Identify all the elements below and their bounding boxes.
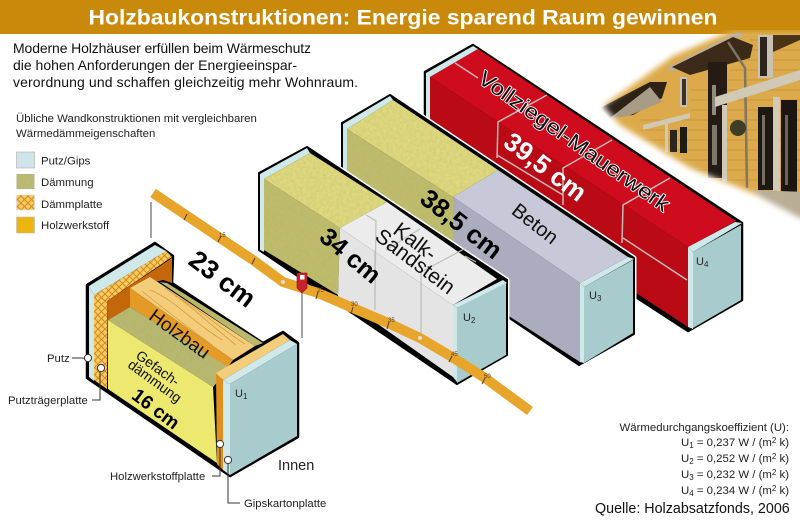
U-values table: Wärmedurchgangskoeffizient (U): [620,422,789,434]
tape ticks and numbers: 25 [317,288,324,294]
label Holzbau: Holzbau [145,306,214,364]
label 23 cm: 23 cm [183,244,261,313]
limestone joints [366,215,476,340]
label U1: 1 [243,392,248,401]
label U2: U [463,312,471,324]
block U1 silhouette [87,243,298,476]
block U3 concrete front [453,197,580,362]
label U2: 2 [471,316,476,325]
label Kalk-Sandstein: Kalk- [389,218,441,265]
tape ticks and numbers [184,214,491,384]
timber stud front [130,288,233,367]
legend item: Dämmung: Dämmung [41,177,94,189]
tape ticks and numbers: 35 [388,318,395,324]
block U3 plaster back [343,96,393,205]
U-values table: U [681,469,689,481]
block U4 plaster top [688,222,742,252]
U-values table: k) [776,485,789,497]
Dämmplatte side [94,295,107,389]
wood panel top [216,334,290,380]
callout: Gipskartonplatte [224,456,326,510]
title bar [0,0,800,34]
U-values table: k) [776,469,789,481]
block U3 plaster side [580,283,584,363]
intro text: die hohen Anforderungen der Energieeinspar- [13,57,297,73]
block U4 plaster side [688,247,693,329]
tape ticks and numbers: 45 [451,352,458,358]
callout: Putz: Putz [47,353,70,365]
rear insulation sliver [160,282,263,346]
callout: Gipskartonplatte: Gipskartonplatte [244,498,326,510]
block U3 insulation front [347,129,453,280]
Gefachdämmung top [108,307,230,387]
legend heading: Wärmedämmeigenschaften [16,128,155,140]
tape ticks and numbers: 30 [351,302,358,308]
block U4 silhouette [425,45,742,331]
label Beton: Beton [507,200,562,249]
U-values table: U [681,453,689,465]
block U4 red front [430,77,688,327]
U-values table: 2 [772,452,777,461]
label Vollziegel-Mauerwerk: Vollziegel-Mauerwerk [474,67,674,217]
U-values table: = 0,252 W / (m [694,453,772,465]
block U2 insulation front [264,179,340,295]
exterior plaster top [89,245,166,295]
block U2 inner face [457,283,506,383]
U-values table: U [681,485,689,497]
callout: Putzträgerplatte [8,364,105,407]
intro text: Moderne Holzhäuser erfüllen beim Wärmeschutz [13,40,311,56]
label Gefachdämmung: dämmung [125,356,185,406]
block U4 plaster back [426,46,478,160]
timber stud top [130,277,255,360]
block U3 silhouette [342,95,634,365]
intro text: verordnung und schaffen gleichzeitig mehr Wohnraum. [13,74,358,90]
label 38,5 cm: 38,5 cm [415,183,508,265]
block U2 limestone top [340,202,497,305]
label U4: U [696,256,704,268]
Gefachdämmung front [108,320,217,463]
U-values table: 2 [772,436,777,445]
label 39,5 cm: 39,5 cm [498,126,593,208]
block U3 plaster top [580,257,634,287]
legend heading: Übliche Wandkonstruktionen mit vergleichbaren [16,113,257,125]
block: Vollziegel-Mauerwerk (U4) [425,45,742,331]
block U2 plaster back [260,148,310,252]
U-values table: 1 [689,441,694,450]
drywall side [223,380,230,475]
label U3: U [589,290,597,302]
block: Holzbau (U1) [87,243,298,476]
legend item: Putz/Gips [16,152,91,168]
block: Kalk-Sandstein (U2) [259,147,507,384]
U-values table: k) [776,437,789,449]
U-values table: 2 [689,457,694,466]
U-values table [620,422,789,498]
brick joints [455,63,687,280]
legend item: Dämmplatte: Dämmplatte [41,199,102,211]
U-values table: 2 [772,468,777,477]
block U2 plaster side [453,305,457,382]
block U3 concrete top [453,170,628,283]
legend item: Dämmung [16,174,94,189]
block U2 limestone front [338,228,453,377]
label 16 cm: 16 cm [127,385,183,434]
wood panel front [216,373,223,470]
U-values table: 4 [689,489,694,498]
callouts [8,353,326,510]
tape ticks and numbers: 50 [484,374,491,380]
drywall top [223,340,297,384]
title bar: Holzbaukonstruktionen: Energie sparend Raum gewinnen [88,6,718,30]
block U2 silhouette [259,147,507,384]
label U3: 3 [597,294,602,303]
block U2 plaster top [453,280,507,308]
block U4 red top [430,49,736,247]
label U1: U [235,388,243,400]
U-values table: 3 [689,473,694,482]
measurement guide lines [151,202,302,338]
tape ticks and numbers: 15 [219,233,226,239]
U-values table: = 0,232 W / (m [694,469,772,481]
block U3 insulation top [347,100,498,197]
label U4: 4 [704,260,709,269]
exterior plaster side [89,286,94,381]
legend item: Dämmplatte [16,195,102,211]
U-values table: 2 [772,484,777,493]
measuring tape [153,193,530,411]
Dämmplatte top [94,251,172,301]
legend [16,113,257,233]
label Kalk-Sandstein: Sandstein [371,225,459,299]
photo: timber house [590,30,800,225]
legend item: Holzwerkstoff: Holzwerkstoff [41,220,110,232]
tape marker [297,273,307,293]
callout: Putz [47,353,92,365]
block U4 inner face [693,225,741,328]
block U3 inner face [584,260,633,363]
callout: Putzträgerplatte: Putzträgerplatte [8,395,88,407]
inner face [230,344,297,475]
label 34 cm: 34 cm [314,222,386,289]
U-values table: U [681,437,689,449]
block U2 insulation top [264,153,387,228]
legend item: Putz/Gips: Putz/Gips [41,156,91,168]
label Innen: Innen [278,458,314,474]
source: Quelle: Holzabsatzfonds, 2006 [595,501,790,517]
brown sheathing [107,258,172,389]
U-values table: = 0,237 W / (m [694,437,772,449]
label Gefachdämmung: Gefach- [133,347,183,389]
U-values table: k) [776,453,789,465]
callout: Holzwerkstoffplatte: Holzwerkstoffplatte [110,471,205,483]
callout: Holzwerkstoffplatte [110,440,224,483]
U-values table: = 0,234 W / (m [694,485,772,497]
legend item: Holzwerkstoff [16,217,110,233]
block: Beton (U3) [342,95,634,365]
